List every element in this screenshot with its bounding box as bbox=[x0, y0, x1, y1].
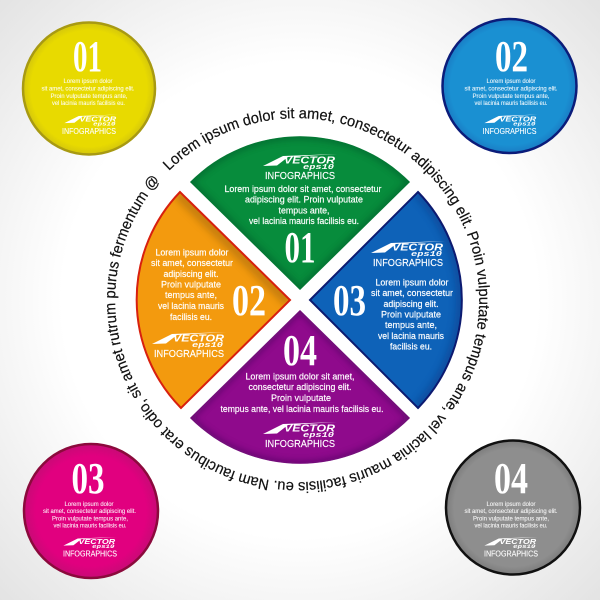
text block: sit amet, consectetur adipiscing elit. bbox=[43, 508, 136, 515]
text block: sit amet, consectetur bbox=[151, 258, 234, 269]
logo: vector eps10: INFOGRAPHICS bbox=[62, 127, 116, 136]
logo: vector eps10: INFOGRAPHICS bbox=[63, 550, 117, 558]
text block: Lorem ipsum dolor bbox=[486, 78, 536, 85]
text block: sit amet, consectetur adipiscing elit. bbox=[42, 86, 135, 92]
number 01: 01 bbox=[284, 223, 316, 272]
text block: vel lacinia mauris bbox=[158, 301, 224, 312]
logo: vector eps10: VECTOR bbox=[79, 114, 117, 123]
logo: vector eps10: VECTOR bbox=[392, 242, 444, 254]
text block bbox=[220, 372, 384, 415]
text block bbox=[43, 501, 136, 530]
logo: vector eps10 bbox=[152, 332, 226, 360]
text block: vel lacinia mauris facilisis eu. bbox=[52, 100, 125, 107]
text block: facilisis eu. bbox=[170, 312, 212, 323]
text block: Proin vulputate tempus ante, bbox=[473, 516, 549, 522]
panel: yellow circle 01 bbox=[23, 22, 155, 154]
logo: vector eps10: VECTOR bbox=[284, 424, 336, 434]
logo: vector eps10: VECTOR bbox=[284, 156, 336, 166]
logo: vector eps10: INFOGRAPHICS bbox=[265, 438, 335, 450]
text block: vel lacinia mauris facilisis eu. bbox=[249, 216, 359, 227]
text block: Lorem ipsum dolor bbox=[64, 78, 113, 85]
text block: vel lacinia mauris facilisis eu. bbox=[474, 100, 548, 107]
logo: vector eps10: eps10 bbox=[513, 544, 535, 550]
logo: vector eps10: eps10 bbox=[92, 544, 114, 550]
logo: vector eps10: eps10 bbox=[192, 342, 223, 350]
panel: purple sector 04 bbox=[190, 310, 410, 464]
text block: Lorem ipsum dolor bbox=[486, 501, 536, 508]
number 03: 03 bbox=[333, 276, 366, 325]
text block bbox=[151, 248, 234, 323]
logo: vector eps10: VECTOR bbox=[499, 537, 537, 546]
logo: vector eps10 bbox=[62, 114, 118, 136]
number 04: 04 bbox=[283, 326, 317, 375]
text block: Proin vulputate bbox=[271, 393, 331, 404]
text block: facilisis eu. bbox=[390, 342, 432, 352]
text block: Proin vulputate bbox=[161, 280, 221, 290]
text block: tempus ante, vel lacinia mauris facilisis eu. bbox=[220, 404, 384, 415]
logo: vector eps10: eps10 bbox=[303, 432, 334, 440]
panel: gray circle 04 bbox=[446, 440, 580, 574]
text block: adipiscing elit. bbox=[384, 299, 438, 310]
text block: Lorem ipsum dolor sit amet, consectetur bbox=[224, 184, 382, 195]
text block bbox=[42, 78, 135, 107]
text block bbox=[464, 78, 558, 107]
text block: Lorem ipsum dolor bbox=[156, 248, 229, 258]
logo: vector eps10 bbox=[63, 537, 117, 558]
text block: consectetur adipiscing elit. bbox=[248, 382, 352, 393]
panel: blue sector 03 bbox=[310, 192, 462, 408]
text block: vel lacinia mauris bbox=[378, 331, 444, 342]
logo: vector eps10: INFOGRAPHICS bbox=[484, 550, 538, 558]
panel: orange sector 02 bbox=[137, 192, 290, 408]
text block: Proin vulputate tempus ante, bbox=[472, 93, 550, 100]
text block: Lorem ipsum dolor bbox=[64, 501, 114, 508]
text block: adipiscing elit. Proin vulputate bbox=[245, 195, 363, 206]
text block bbox=[464, 501, 558, 530]
panel: green sector 01 bbox=[190, 136, 410, 290]
text block: Lorem ipsum dolor sit amet, bbox=[246, 372, 354, 382]
text block: adipiscing elit. bbox=[164, 269, 218, 280]
number 03: 03 bbox=[72, 454, 104, 503]
number 04: 04 bbox=[494, 454, 528, 503]
text block bbox=[371, 278, 454, 352]
logo: vector eps10: INFOGRAPHICS bbox=[373, 257, 443, 269]
text block: tempus ante, bbox=[165, 290, 217, 301]
number 02: 02 bbox=[232, 276, 266, 325]
panel: blue circle 02 bbox=[442, 19, 576, 153]
logo: vector eps10 bbox=[484, 537, 538, 558]
logo: vector eps10 bbox=[263, 154, 337, 182]
circular text ring: Lorem ipsum dolor sit amet, consectetur adipiscing elit. Proin vulputate tempus ante, vel lacinia mauris facilisis eu. Nam faucibus erat odio, sit amet rutrum purus fermentum @ bbox=[106, 107, 490, 494]
number 02: 02 bbox=[495, 32, 528, 81]
logo: vector eps10 bbox=[263, 422, 337, 450]
logo: vector eps10: VECTOR bbox=[499, 114, 537, 123]
logo: vector eps10: INFOGRAPHICS bbox=[265, 170, 335, 182]
text block: sit amet, consectetur adipiscing elit. bbox=[464, 86, 558, 92]
logo: vector eps10: INFOGRAPHICS bbox=[154, 348, 224, 360]
text block: tempus ante, bbox=[278, 205, 330, 216]
text block: tempus ante, bbox=[385, 320, 437, 331]
text block: Proin vulputate tempus ante, bbox=[50, 93, 128, 100]
logo: vector eps10: INFOGRAPHICS bbox=[482, 127, 537, 136]
text block: sit amet, consectetur adipiscing elit. bbox=[464, 508, 558, 515]
logo: vector eps10: eps10 bbox=[513, 121, 535, 127]
logo: vector eps10 bbox=[371, 241, 445, 269]
logo: vector eps10: eps10 bbox=[411, 251, 442, 259]
number 01: 01 bbox=[73, 32, 102, 81]
logo: vector eps10: VECTOR bbox=[78, 537, 116, 546]
text block: Proin vulputate tempus ante, bbox=[52, 516, 128, 522]
logo: vector eps10 bbox=[482, 114, 538, 136]
text block: Proin vulputate bbox=[381, 310, 441, 320]
text block bbox=[224, 184, 382, 227]
text block: Lorem ipsum dolor bbox=[376, 278, 449, 288]
text block: vel lacinia mauris facilisis eu. bbox=[474, 522, 548, 530]
text block: vel lacinia mauris facilisis eu. bbox=[54, 522, 127, 530]
panel: magenta circle 03 bbox=[24, 444, 158, 578]
logo: vector eps10: eps10 bbox=[303, 164, 334, 172]
logo: vector eps10: eps10 bbox=[93, 121, 115, 127]
logo: vector eps10: VECTOR bbox=[173, 334, 225, 344]
text block: sit amet, consectetur bbox=[371, 288, 454, 299]
